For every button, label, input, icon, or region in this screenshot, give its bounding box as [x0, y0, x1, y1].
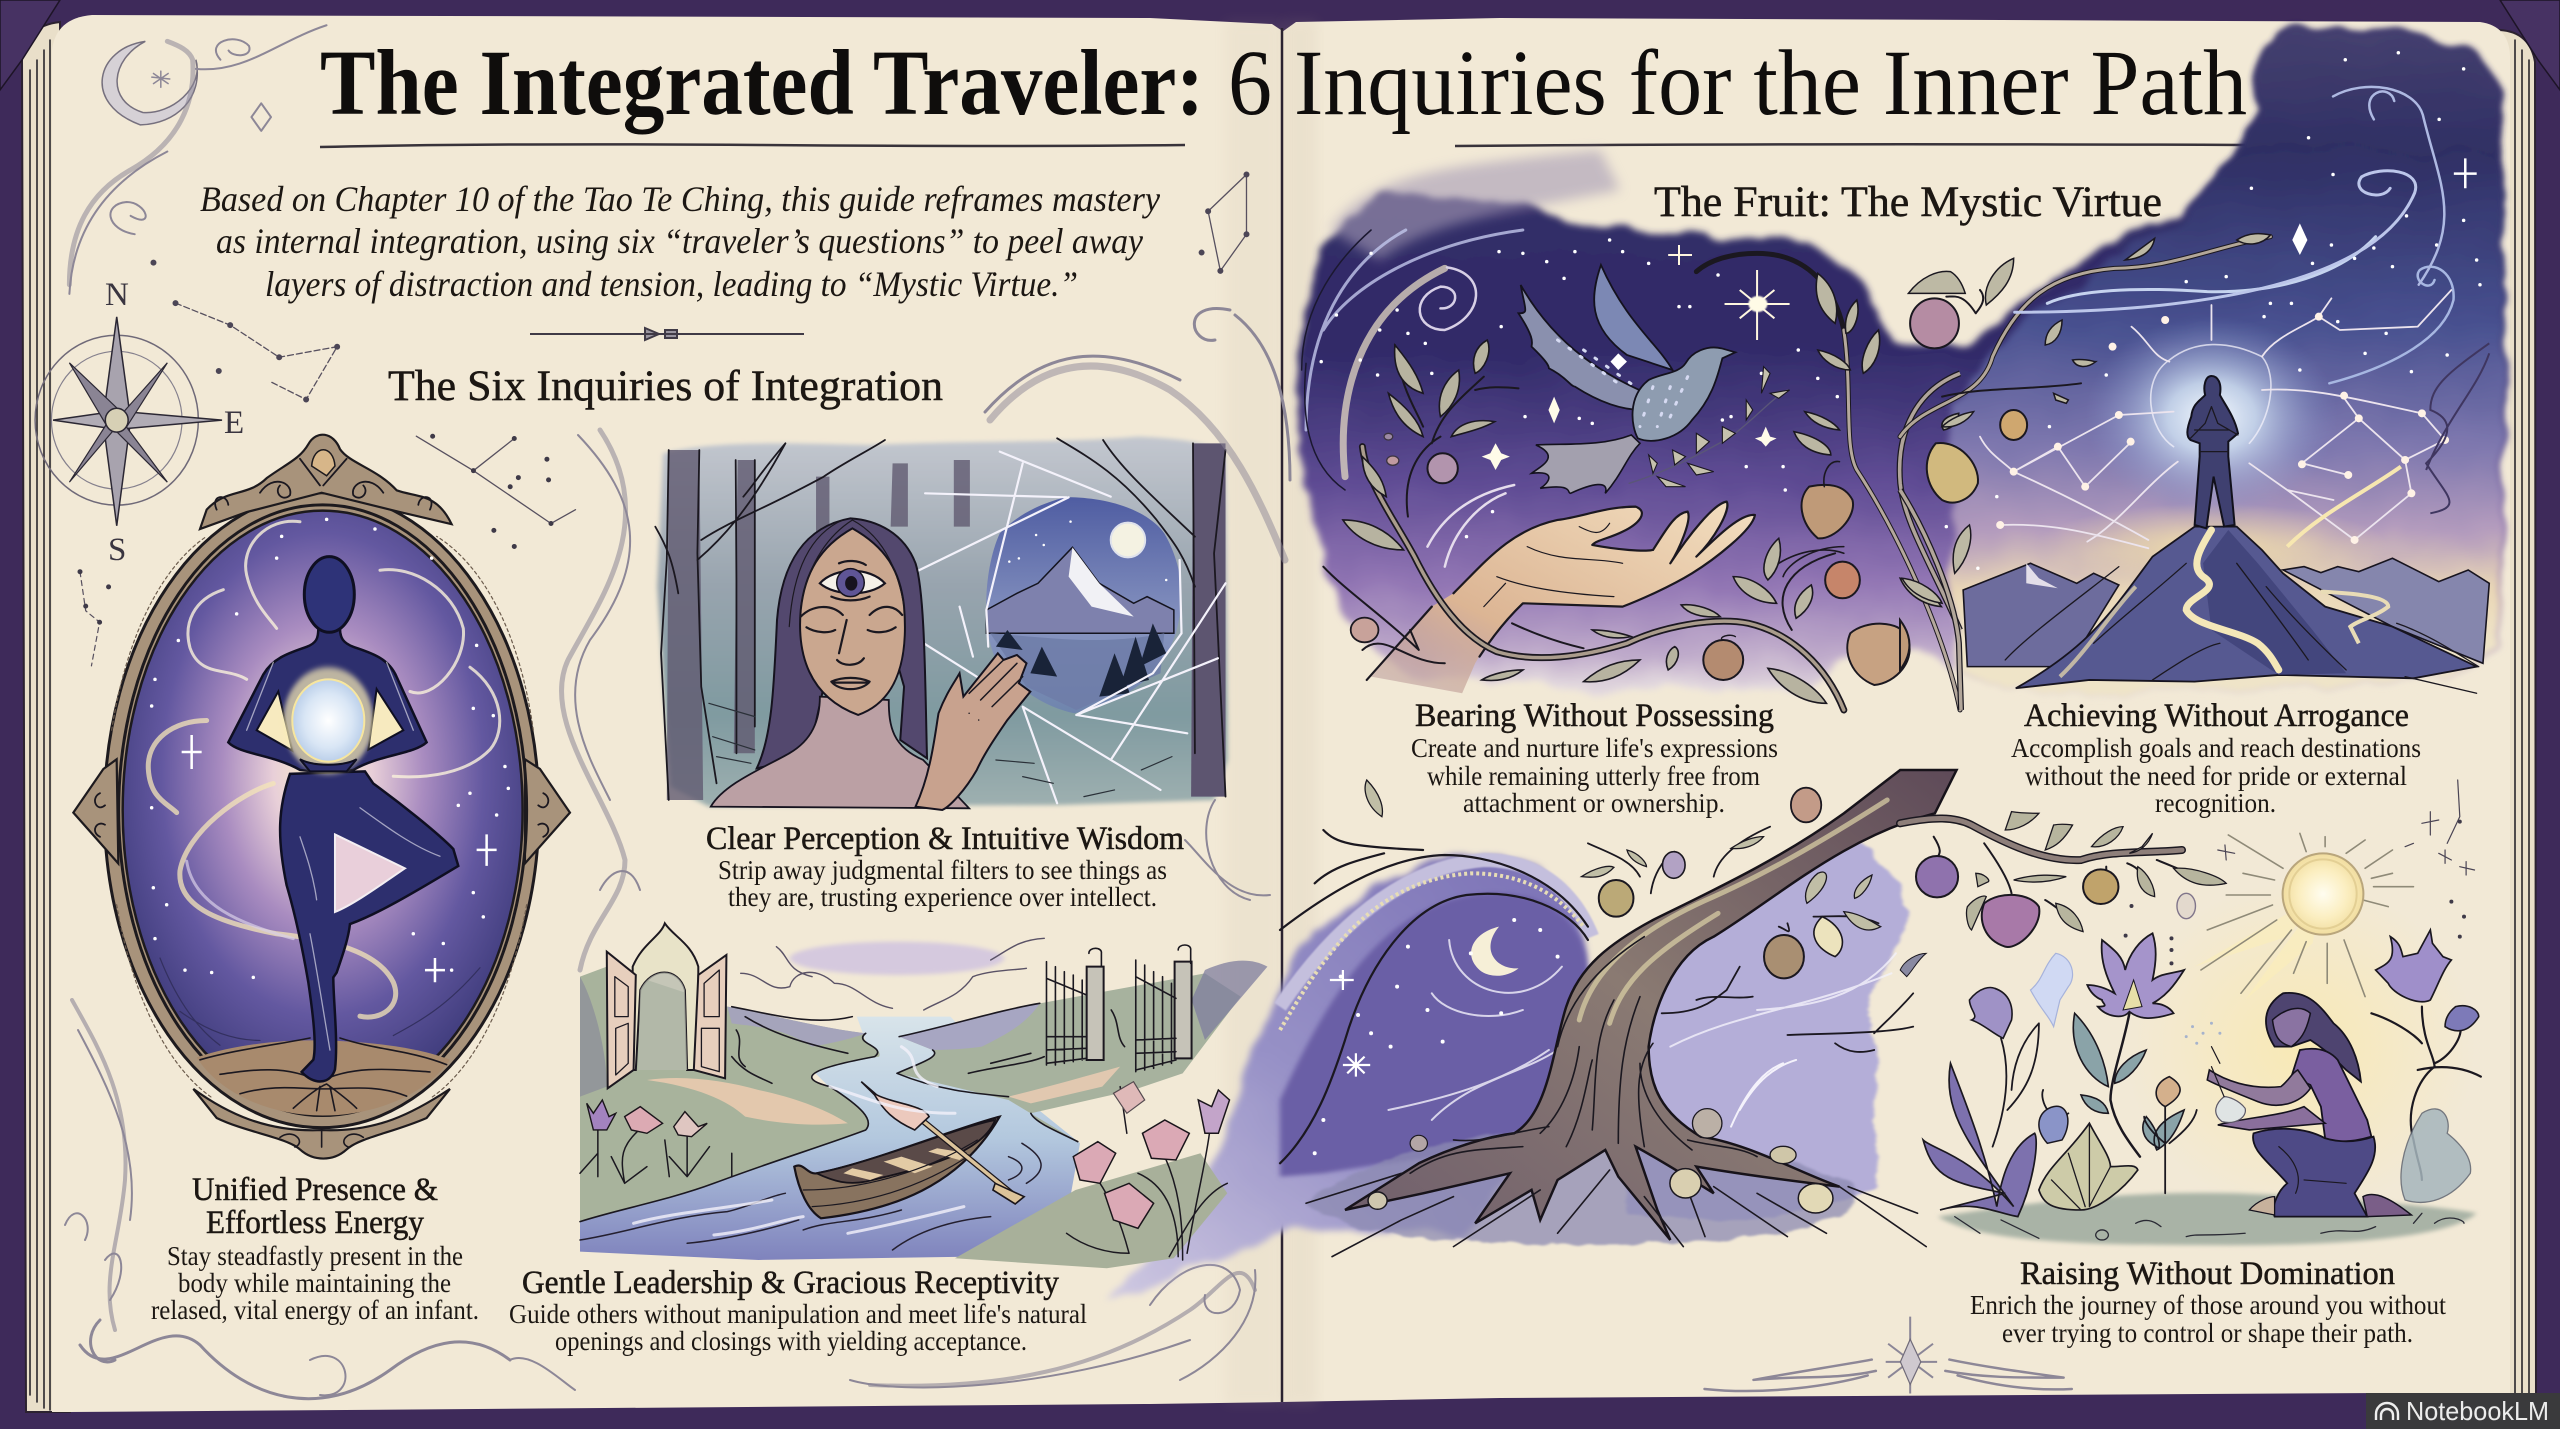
small stars near sun — [2126, 780, 2475, 963]
iron gates — [1046, 945, 1192, 1072]
mountain range — [1963, 527, 2489, 693]
caption: Bearing Without Possessing: attachment or ownership. — [1463, 788, 1725, 818]
page stack: right — [2500, 30, 2536, 1408]
panel: river with boat and gates — [580, 923, 1267, 1268]
caption: Bearing Without Possessing: while remaining utterly free from — [1427, 761, 1760, 791]
wispy upper-left clouds — [1330, 150, 1620, 260]
figure in tree pose — [228, 557, 458, 1081]
right bank — [897, 961, 1267, 1142]
caption: Achieving Without Arrogance: Achieving Without Arrogance — [2024, 698, 2409, 734]
caption: Bearing Without Possessing — [1411, 698, 1778, 818]
heading: The Fruit: The Mystic Virtue: The Fruit: The Mystic Virtue — [1654, 179, 2162, 226]
constellation: upper left — [153, 263, 337, 400]
left vine with leaves and fruit — [1323, 340, 1844, 710]
caption: Clear Perception: Strip away judgmental filters to see things as — [718, 855, 1167, 885]
caption: Raising Without Domination: Raising Without Domination — [2020, 1256, 2395, 1292]
captions on right page — [1411, 698, 2446, 1348]
page stack: left — [22, 22, 70, 1412]
caption: Raising Without Domination: ever trying to control or shape their path. — [2002, 1318, 2413, 1348]
panel: portrait with third eye — [655, 437, 1227, 810]
central vines and fruit — [1696, 253, 1960, 710]
upper sky: left lobe — [1295, 28, 2505, 695]
vine with fruit — [1900, 234, 2270, 710]
caption: Gentle Leadership: openings and closings with yielding acceptance. — [555, 1326, 1027, 1356]
caption: Achieving Without Arrogance: Accomplish goals and reach destinations — [2011, 733, 2421, 763]
panel: garden with sun and tending woman — [1900, 780, 2481, 1245]
foreground grass marks — [709, 703, 1172, 797]
panel: figure on mountain under constellations — [1900, 223, 2489, 710]
intro divider — [530, 328, 804, 340]
decoration: moon, compass and constellations (top-left) — [35, 25, 1246, 666]
golden horizon glow — [2035, 503, 2388, 590]
ground with roots — [160, 958, 480, 1116]
constellation lines — [1980, 290, 2451, 548]
sun with rays — [2195, 833, 2413, 1000]
caption: Bearing Without Possessing: Bearing Without Possessing — [1415, 698, 1774, 734]
constellation: right of intro — [1202, 174, 1246, 271]
caption: Unified Presence: Unified Presence & — [192, 1172, 438, 1208]
caption: Achieving Without Arrogance — [2011, 698, 2421, 818]
energy swirls — [148, 521, 500, 1017]
panel: mirror with tree-pose figure — [73, 435, 570, 1159]
intro text — [200, 179, 1160, 304]
icon: compass rose — [35, 317, 222, 526]
water ripple lines — [580, 1143, 1044, 1257]
warm sunlight wash — [2123, 880, 2477, 1213]
spirals and streams — [1302, 230, 1523, 567]
title: 6 Inquiries for the Inner Path — [1228, 32, 2247, 135]
tree trunk and roots — [1306, 770, 1960, 1257]
olive sprig — [1629, 367, 1790, 487]
neck and shoulders — [711, 697, 969, 808]
halo behind figure — [2085, 317, 2338, 517]
lavender blob and moon swirl beside trunk — [1280, 770, 1960, 1257]
raised hand — [916, 653, 1030, 810]
intro text: layers of distraction and tension, leading to “Mystic Virtue.” — [265, 264, 1078, 304]
tending woman — [2186, 993, 2411, 1217]
caption: Gentle Leadership: Gentle Leadership & Gracious Receptivity — [522, 1265, 1059, 1301]
NotebookLM watermark: NotebookLM — [2406, 1396, 2549, 1426]
caption: Gentle Leadership — [509, 1265, 1087, 1356]
right climbing plant — [2371, 930, 2481, 1202]
flowing ribbon from left page to tree — [1102, 852, 1592, 1293]
misty forest background — [657, 437, 1227, 807]
rowing boat — [794, 1117, 1000, 1218]
upper sky: right lobe — [1950, 28, 2505, 695]
left bank — [580, 967, 880, 1222]
intro text: Based on Chapter 10 of the Tao Te Ching, this guide reframes mastery — [200, 179, 1160, 219]
right tree branch with fruit — [1900, 812, 2226, 947]
hair — [757, 518, 927, 768]
compass letters: E — [224, 405, 244, 441]
caption: Achieving Without Arrogance: without the need for pride or external — [2025, 761, 2407, 791]
evening sky wash — [790, 942, 1004, 975]
caption: Bearing Without Possessing: Create and nurture life's expressions — [1411, 733, 1778, 763]
open hand — [1367, 502, 1755, 693]
caption: Gentle Leadership: Guide others without manipulation and meet life's natural — [509, 1299, 1087, 1329]
intro text: as internal integration, using six “traveler’s questions” to peel away — [216, 221, 1143, 261]
title — [320, 32, 2247, 135]
NotebookLM watermark — [2366, 1393, 2560, 1429]
ground marks — [1955, 1213, 2464, 1240]
forest trees — [655, 438, 1226, 800]
corner cover details — [0, 0, 2560, 90]
heading: The Six Inquiries of Integration: The Six Inquiries of Integration — [388, 363, 943, 410]
caption: Unified Presence: Stay steadfastly present in the — [167, 1241, 463, 1271]
tree fruit and leaves — [1365, 780, 1926, 978]
left flowers — [580, 1100, 732, 1183]
tall lily — [2073, 933, 2197, 1193]
right foreground: bank and flowers — [955, 1082, 1230, 1268]
deep purple moon swirl — [1280, 830, 1896, 1177]
caption: Raising Without Domination: Enrich the journey of those around you without — [1970, 1290, 2446, 1320]
caption: Unified Presence — [151, 1172, 479, 1325]
stars — [1321, 240, 1837, 537]
compass letters: S — [108, 532, 126, 568]
caption: Clear Perception: they are, trusting experience over intellect. — [728, 882, 1157, 912]
mirror frame — [73, 435, 570, 1159]
roots soil wash — [1306, 1127, 1856, 1245]
caption: Clear Perception — [706, 821, 1184, 912]
dove — [1519, 265, 1735, 493]
caption: Clear Perception: Clear Perception & Intuitive Wisdom — [706, 821, 1184, 857]
caption: Raising Without Domination — [1970, 1256, 2446, 1348]
caption: Unified Presence: body while maintaining the — [178, 1268, 451, 1298]
mirror interior sky — [123, 511, 523, 1110]
icon: crescent moon — [69, 25, 327, 294]
book spine — [1225, 20, 1317, 1405]
compass letters: N — [105, 277, 129, 313]
left page flourishes — [65, 309, 1290, 1399]
distant cloud lines — [741, 938, 1044, 1010]
starry stream — [1946, 223, 2477, 568]
bottom star ornament (right page) — [1704, 1317, 2072, 1393]
title rule — [320, 144, 2245, 147]
panel: dove, hand and vines — [1302, 230, 1960, 710]
constellation: beside mirror — [80, 572, 109, 666]
glowing path — [2060, 530, 2388, 677]
left plants — [1923, 988, 2138, 1217]
oar and rowing hand — [861, 1082, 1024, 1204]
constellation: above portrait — [416, 436, 575, 546]
open arched door — [607, 923, 726, 1088]
shattered glass lines — [906, 452, 1226, 803]
top swirl over right lobe — [2015, 53, 2480, 312]
right side dark washes — [2426, 343, 2489, 513]
window with mountain and moon — [986, 497, 1181, 713]
fairy wisp — [2030, 953, 2073, 1027]
right page — [1282, 18, 2510, 1402]
river water — [580, 1017, 1080, 1260]
compass letters — [105, 277, 244, 568]
face — [789, 520, 905, 715]
caption: Achieving Without Arrogance: recognition. — [2155, 788, 2276, 818]
stars in mirror — [152, 519, 508, 982]
ground wash — [1938, 1193, 2477, 1245]
title: The Integrated Traveler: — [320, 32, 1204, 135]
meditating figure — [2187, 376, 2238, 528]
left page — [52, 15, 1284, 1412]
lavender wash right of trunk — [1618, 837, 1909, 1220]
caption: Unified Presence: Effortless Energy — [206, 1205, 424, 1241]
caption: Unified Presence: relased, vital energy of an infant. — [151, 1295, 479, 1325]
